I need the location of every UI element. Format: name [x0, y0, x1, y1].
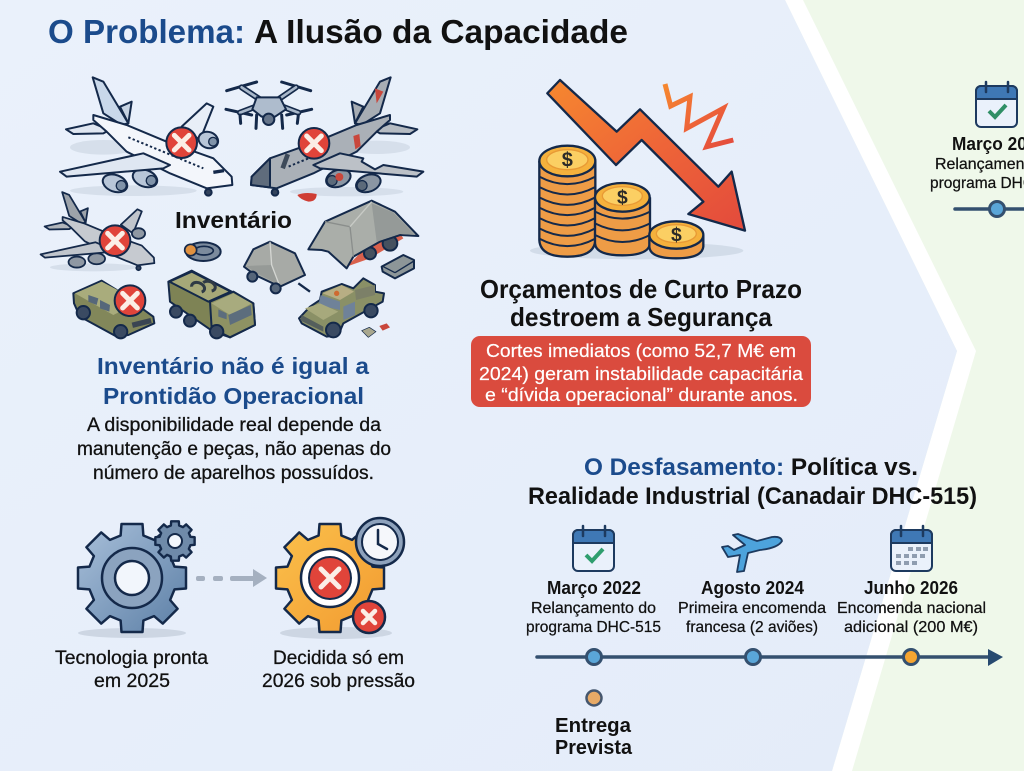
- title: O Problema:: [48, 13, 245, 50]
- heading: short-term budgets: [480, 274, 802, 332]
- icon: orange gear with clock and X: [276, 518, 404, 639]
- timeline label: March 2022: Março 2022: [547, 578, 641, 598]
- icon: covered trailer: [244, 242, 310, 293]
- icon: calendar with grid, June 2026: [891, 526, 932, 571]
- timeline label: August 2024: Primeira encomenda: [678, 600, 826, 617]
- icon: calendar with check, March 2022: [573, 526, 614, 571]
- callout: immediate cuts: Cortes imediatos (como 52,7 M€ em: [486, 340, 796, 361]
- icon: single coin: [649, 221, 703, 258]
- caption: decided only in 2026: Decidida só em: [273, 647, 404, 669]
- icon: cargo truck: [168, 271, 255, 338]
- icon: medium coin stack: [595, 183, 650, 255]
- label: Inventário: Inventário: [175, 207, 292, 233]
- callout: immediate cuts: e “dívida operacional” durante anos.: [485, 384, 798, 405]
- timeline label: June 2026: Encomenda nacional: [837, 600, 986, 617]
- timeline label: August 2024: [678, 578, 826, 636]
- timeline label: August 2024: francesa (2 aviões): [686, 619, 818, 636]
- text block: real availability: [77, 415, 391, 484]
- timeline label: June 2026: Junho 2026: [864, 578, 958, 598]
- icon: pickup truck: [299, 278, 390, 337]
- marker: planned delivery: Entrega: [555, 715, 632, 737]
- icon: red X badges: [100, 127, 329, 316]
- text block: real availability: manutenção e peças, não apenas do: [77, 439, 391, 460]
- coin shadow: [530, 242, 743, 259]
- coin symbol: $: [671, 225, 682, 246]
- timeline label: June 2026: [837, 578, 986, 636]
- icon: tall coin stack: [539, 146, 595, 257]
- callout: immediate cuts: [471, 336, 811, 407]
- label: March 2022 repeated: [930, 134, 1024, 192]
- icon: small grey airliner: [41, 192, 154, 270]
- illustration: falling budget: [530, 80, 745, 259]
- timeline label: March 2022: Relançamento do: [531, 600, 656, 617]
- callout: immediate cuts: 2024) geram instabilidade capacitária: [479, 363, 804, 384]
- divider: white chevron band: [785, 0, 976, 771]
- icon: coil of rope: [185, 242, 221, 261]
- caption: technology ready: em 2025: [94, 670, 170, 692]
- heading: the gap: [528, 454, 977, 510]
- marker: planned delivery: Prevista: [555, 737, 633, 759]
- timeline label: March 2022: programa DHC-515: [526, 619, 661, 636]
- icon: ammunition crate: [382, 255, 414, 278]
- icon: zigzag: [665, 84, 733, 147]
- heading: short-term budgets: Orçamentos de Curto Prazo: [480, 274, 802, 304]
- heading: short-term budgets: destroem a Segurança: [510, 302, 773, 332]
- timeline label: August 2024: Agosto 2024: [701, 578, 804, 598]
- heading: inventory is not readiness: Prontidão Operacional: [103, 383, 364, 409]
- marker: planned delivery: [555, 690, 633, 759]
- cut-off timeline entry on the green section: [930, 82, 1024, 216]
- timeline axis: [537, 649, 1003, 666]
- caption: technology ready: Tecnologia pronta: [55, 647, 208, 669]
- arrow: dashed gear to gear: [196, 569, 267, 587]
- timeline fragment: [955, 202, 1024, 216]
- icon: drone: [226, 82, 312, 128]
- icon: covered tent: [308, 201, 418, 268]
- title: A Ilusão da Capacidade: [254, 13, 628, 50]
- heading: the gap: O Desfasamento: Política vs.: [584, 454, 918, 481]
- icon: army vehicle: [73, 281, 154, 338]
- timeline label: March 2022: [526, 578, 661, 636]
- title: [48, 13, 628, 50]
- text block: real availability: A disponibilidade real depende da: [87, 415, 381, 436]
- icon: white airliner: [60, 77, 232, 196]
- heading: inventory is not readiness: Inventário não é igual a: [97, 353, 369, 379]
- caption: decided only in 2026: [262, 647, 415, 692]
- arrow: falling red arrow: [547, 80, 745, 231]
- coin symbol: $: [617, 187, 628, 208]
- illustration: inventory of equipment: [41, 77, 423, 338]
- text block: real availability: número de aparelhos possuídos.: [93, 463, 374, 484]
- icon: blue technology gear: [78, 521, 195, 638]
- shadows: [50, 140, 410, 271]
- heading: the gap: Realidade Industrial (Canadair DHC-515): [528, 483, 977, 510]
- icon: plane, August 2024: [722, 534, 782, 572]
- timeline label: June 2026: adicional (200 M€): [844, 619, 978, 636]
- caption: technology ready: [55, 647, 208, 692]
- coin symbol: $: [562, 150, 573, 172]
- icon: calendar with check: [976, 82, 1017, 127]
- caption: decided only in 2026: 2026 sob pressão: [262, 670, 415, 692]
- icon: damaged grey aircraft: [251, 77, 423, 202]
- heading: inventory is not readiness: [97, 353, 369, 409]
